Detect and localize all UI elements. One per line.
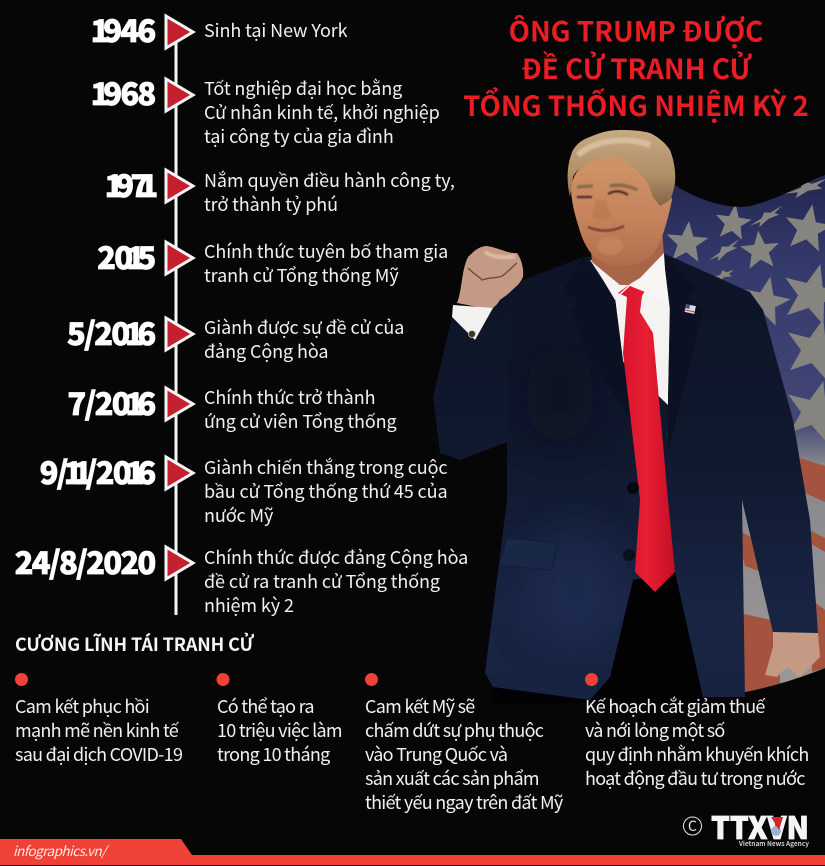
- mouth: [588, 226, 624, 231]
- logo: TTXVN: TTXVN: [711, 803, 809, 848]
- platform item 3: sản xuất các sản phẩm: [365, 765, 539, 791]
- platform item 1: [15, 673, 183, 767]
- platform item 2: Có thể tạo ra: [217, 693, 314, 719]
- panel: re-election platform: [15, 631, 809, 815]
- jacket buttons: [627, 482, 639, 494]
- platform item 3: thiết yếu ngay trên đất Mỹ: [365, 789, 564, 815]
- title: TỔNG THỐNG NHIỆM KỲ 2: [463, 84, 809, 124]
- event 24/8/2020: 24/8/2020: [15, 538, 155, 583]
- platform item 3: [365, 673, 564, 815]
- jacket shading: [533, 366, 617, 636]
- raised fist: [457, 246, 523, 310]
- event 7/2016: ứng cử viên Tổng thống: [204, 408, 397, 434]
- title: [463, 10, 809, 124]
- event 7/2016: [67, 379, 397, 434]
- event 7/2016: 7/2016: [67, 379, 155, 424]
- platform heading: CƯƠNG LĨNH TÁI TRANH CỬ: [15, 631, 255, 657]
- copyright mark: C: [688, 816, 697, 836]
- event 24/8/2020: Chính thức được đảng Cộng hòa: [204, 544, 468, 570]
- event 7/2016: Chính thức trở thành: [204, 384, 375, 410]
- timeline: [15, 6, 468, 618]
- event 5/2016: đảng Cộng hòa: [204, 338, 328, 364]
- event 2015: [97, 233, 448, 288]
- event 1971: Nắm quyền điều hành công ty,: [204, 167, 455, 193]
- timeline axis: [174, 40, 178, 615]
- cuff link: [468, 330, 476, 338]
- left sleeve: [433, 270, 580, 460]
- face: [571, 155, 672, 266]
- event 9/11/2016: Giành chiến thắng trong cuộc: [204, 454, 448, 480]
- right hand: [765, 632, 820, 677]
- platform item 4: hoạt động đầu tư trong nước: [585, 765, 805, 791]
- platform item 1: mạnh mẽ nền kinh tế: [15, 717, 179, 743]
- event 24/8/2020: nhiệm kỳ 2: [204, 592, 294, 618]
- event 1968: Cử nhân kinh tế, khởi nghiệp: [204, 99, 440, 125]
- hair: [568, 130, 675, 206]
- platform item 1: Cam kết phục hồi: [15, 693, 149, 719]
- chin: [597, 237, 623, 255]
- event 5/2016: [67, 309, 404, 364]
- platform item 4: Kế hoạch cắt giảm thuế: [585, 693, 765, 719]
- red necktie: [618, 284, 675, 592]
- event 1968: 1968: [91, 69, 155, 114]
- event 1971: trở thành tỷ phú: [204, 191, 338, 217]
- nose: [592, 200, 611, 220]
- platform item 2: 10 triệu việc làm: [217, 717, 342, 743]
- event 9/11/2016: bầu cử Tổng thống thứ 45 của: [204, 478, 448, 504]
- title: ĐỀ CỬ TRANH CỬ: [521, 47, 753, 87]
- photo: Trump figure: [433, 130, 820, 703]
- shirt cuff: [452, 305, 493, 340]
- event 2015: Chính thức tuyên bố tham gia: [204, 238, 448, 264]
- flag stars: [665, 174, 825, 445]
- platform item 4: [585, 673, 809, 791]
- event 24/8/2020: đề cử ra tranh cử Tổng thống: [204, 568, 440, 594]
- platform item 4: và nới lỏng một số: [585, 717, 725, 743]
- panel: waving flag: [660, 170, 825, 700]
- source url: infographics.vn/: [13, 840, 109, 860]
- jacket body: [485, 253, 818, 700]
- eyes: [577, 191, 628, 197]
- platform item 3: chấm dứt sự phụ thuộc: [365, 717, 544, 743]
- event 1971: [105, 161, 455, 217]
- platform item 2: trong 10 tháng: [217, 741, 330, 767]
- event 9/11/2016: [40, 448, 448, 528]
- platform item 4: quy định nhằm khuyến khích: [585, 741, 809, 767]
- event 5/2016: Giành được sự đề cử của: [204, 314, 404, 340]
- event 1946: Sinh tại New York: [204, 17, 348, 43]
- event 5/2016: 5/2016: [67, 309, 155, 354]
- platform item 3: Cam kết Mỹ sẽ: [365, 693, 475, 719]
- event 2015: tranh cử Tổng thống Mỹ: [204, 262, 399, 288]
- lapel pin: [684, 304, 696, 314]
- flag stripes: [742, 532, 758, 571]
- event 1968: tại công ty của gia đình: [204, 123, 394, 149]
- platform item 1: sau đại dịch COVID-19: [15, 741, 183, 767]
- event 1968: Tốt nghiệp đại học bằng: [204, 75, 402, 101]
- footer bar: [0, 839, 825, 865]
- logo: TTXVN: Vietnam News Agency: [738, 838, 809, 848]
- eyebrows: [577, 185, 637, 190]
- trousers: [492, 570, 705, 703]
- neck: [590, 228, 664, 285]
- event 1968: [91, 69, 440, 149]
- collar: [590, 253, 667, 303]
- platform item 2: [216, 673, 342, 767]
- event 1946: [91, 6, 348, 51]
- event 2015: 2015: [97, 233, 155, 278]
- platform item 3: vào Trung Quốc và: [365, 741, 507, 767]
- title: ÔNG TRUMP ĐƯỢC: [509, 10, 763, 50]
- event 9/11/2016: nước Mỹ: [204, 502, 274, 528]
- event 9/11/2016: 9/11/2016: [40, 448, 155, 493]
- event 24/8/2020: [15, 538, 468, 618]
- event 1971: 1971: [105, 161, 156, 206]
- event 1946: 1946: [91, 6, 155, 51]
- shirt front: [590, 253, 670, 405]
- jacket pocket: [499, 538, 557, 570]
- lapels: [562, 257, 642, 437]
